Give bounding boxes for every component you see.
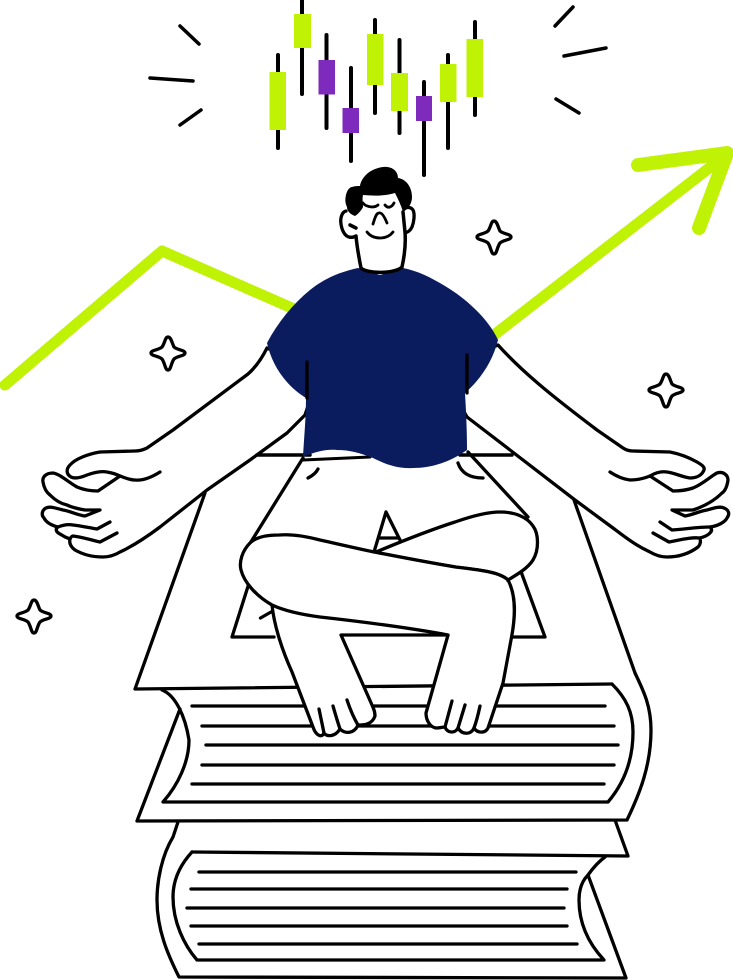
toes xyxy=(319,700,480,733)
smile xyxy=(367,232,393,238)
shirt creases xyxy=(307,355,467,398)
shirt xyxy=(267,268,498,468)
nose xyxy=(373,213,387,224)
far leg and foot xyxy=(272,580,514,736)
trousers sheet xyxy=(135,455,635,689)
sparkle top xyxy=(477,221,511,254)
trouser gap triangles xyxy=(232,512,545,637)
book lines xyxy=(192,706,618,784)
thigh lines and pockets xyxy=(249,452,528,545)
sparkle left xyxy=(151,337,185,370)
growth arrow xyxy=(5,153,727,385)
left ear xyxy=(341,211,356,237)
hair xyxy=(345,167,412,216)
left fingers xyxy=(58,472,160,542)
right fingers xyxy=(610,472,710,542)
right arm xyxy=(440,345,729,557)
sparkle right xyxy=(649,374,683,407)
excitement rays right xyxy=(555,7,606,113)
waist line xyxy=(257,455,512,460)
excitement rays left xyxy=(150,26,201,125)
face xyxy=(350,195,405,272)
crossed legs xyxy=(240,512,538,635)
book lines xyxy=(187,872,577,944)
right ear xyxy=(405,207,414,233)
sparkle bottom left xyxy=(17,600,51,633)
candlestick chart xyxy=(270,0,483,175)
closed eyes xyxy=(363,203,394,207)
left arm xyxy=(42,348,320,557)
head and neck xyxy=(341,167,414,272)
upper book xyxy=(137,673,651,821)
jaw and neck xyxy=(350,212,405,272)
lower book xyxy=(157,820,628,978)
